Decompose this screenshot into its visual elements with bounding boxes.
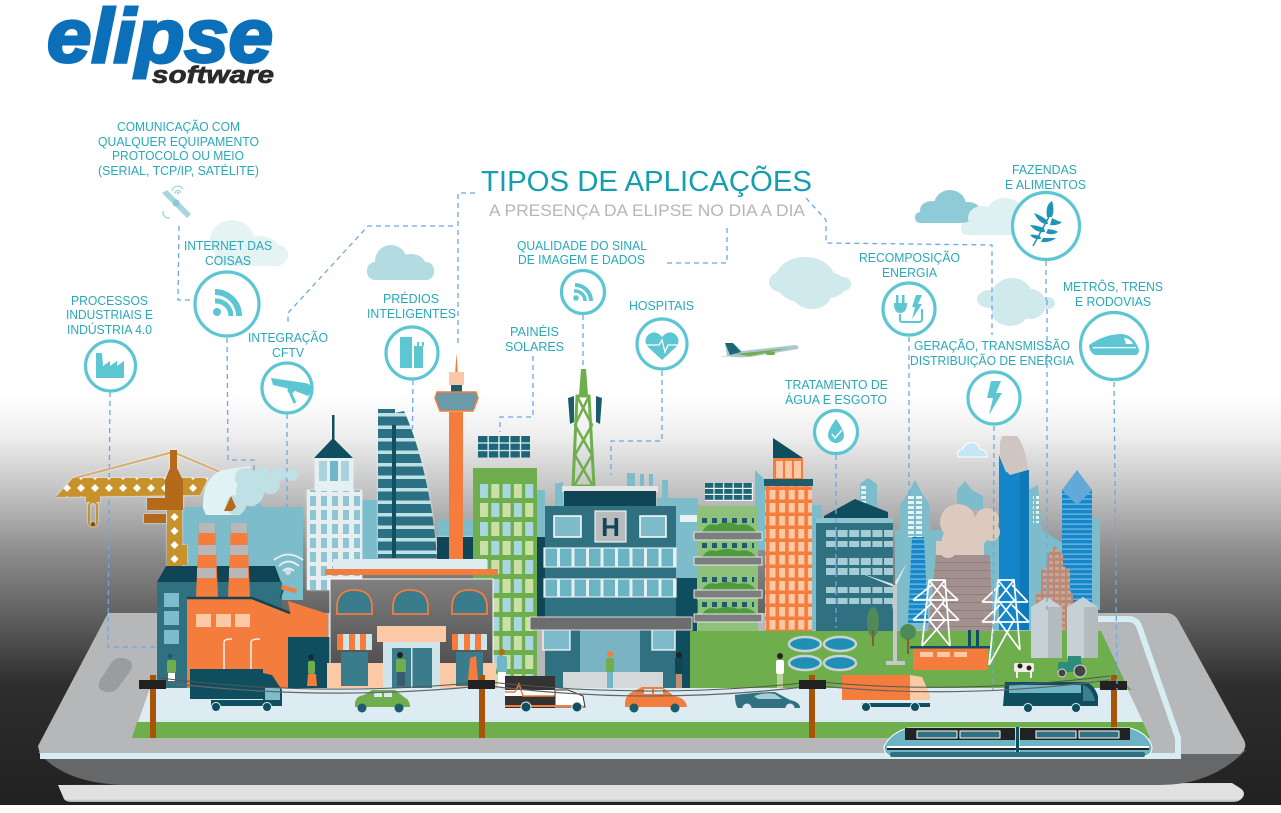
hospital: H <box>601 512 620 542</box>
factory <box>157 523 330 690</box>
callout: internet das coisas <box>184 239 272 336</box>
callout: hospitais: HOSPITAIS <box>629 299 694 313</box>
wind turbine and trees <box>860 563 916 665</box>
callout: processos industriais: INDÚSTRIA 4.0 <box>67 322 152 337</box>
callout: metrôs trens rodovias: E RODOVIAS <box>1075 295 1151 309</box>
callout: qualidade do sinal <box>517 239 647 314</box>
label: comunicação <box>98 120 259 178</box>
label: comunicação: (SERIAL, TCP/IP, SATÉLITE) <box>98 163 259 178</box>
brown building <box>1036 546 1073 632</box>
callout: hospitais <box>629 299 694 369</box>
cloud: pale right <box>977 278 1055 326</box>
awnings <box>337 634 487 650</box>
teal office block <box>816 499 893 631</box>
callout: prédios inteligentes: INTELIGENTES <box>367 307 456 321</box>
callout: integração cftv: INTEGRAÇÃO <box>248 331 328 345</box>
cloud: small sky blue <box>958 443 987 457</box>
callout: internet das coisas: INTERNET DAS <box>184 239 272 253</box>
callout: recomposição energia: ENERGIA <box>882 266 938 280</box>
callout: metrôs trens rodovias <box>1063 279 1163 380</box>
smoke from factory chimneys <box>203 466 298 515</box>
label: painéis solares <box>505 324 564 354</box>
callout: processos industriais: INDUSTRIAIS E <box>66 308 153 322</box>
power pylons <box>913 580 1029 665</box>
callout: tratamento de água: TRATAMENTO DE <box>785 378 888 392</box>
callout: recomposição energia: RECOMPOSIÇÃO <box>859 251 960 265</box>
orange tower <box>764 438 813 631</box>
logo: elipse software: software <box>152 62 274 89</box>
cloud: teal top-right <box>915 190 980 223</box>
cloud: pale top-right <box>961 198 1036 235</box>
main title <box>481 164 812 220</box>
label: painéis solares: SOLARES <box>505 340 564 354</box>
terraces <box>694 532 762 622</box>
arched windows <box>337 590 487 614</box>
satellite icon <box>162 186 191 218</box>
callout: processos industriais: PROCESSOS <box>71 294 148 308</box>
label: comunicação: PROTOCOLO OU MEIO <box>112 149 244 163</box>
callout: internet das coisas: COISAS <box>205 254 251 268</box>
wifi and camera on factory <box>274 554 303 598</box>
callout: geração transmissão <box>910 339 1075 424</box>
small window strips on skyline <box>680 486 1039 537</box>
bus <box>1003 682 1098 712</box>
callout: geração transmissão: DISTRIBUIÇÃO DE ENERGIA <box>910 354 1075 368</box>
cloud: teal centre-left <box>367 245 434 280</box>
water treatment tanks <box>789 637 856 670</box>
label: painéis solares: PAINÉIS <box>510 324 559 339</box>
terrace plants <box>702 522 756 614</box>
callout: processos industriais <box>66 294 153 391</box>
small blue striped tower <box>908 537 928 623</box>
white office tower <box>307 415 362 590</box>
orange car <box>625 687 687 712</box>
telecom tower <box>568 369 602 486</box>
lawn and road <box>132 631 1150 738</box>
people <box>167 649 784 688</box>
airplane <box>718 343 799 357</box>
observation tower <box>435 353 478 562</box>
small windows <box>702 518 754 607</box>
high speed train <box>884 727 1152 757</box>
cloud: pale left <box>210 220 288 266</box>
orange truck <box>842 675 930 712</box>
dashed connectors over city <box>836 300 1117 690</box>
solar panels <box>478 436 530 458</box>
storefront <box>325 559 498 690</box>
callout: tratamento de água: ÁGUA E ESGOTO <box>785 392 887 407</box>
label: comunicação: QUALQUER EQUIPAMENTO <box>98 135 259 149</box>
dashed connector lines <box>108 193 1046 647</box>
clouds <box>210 190 1055 326</box>
subtitle: A PRESENÇA DA ELIPSE NO DIA A DIA <box>489 201 806 220</box>
callout: prédios inteligentes: PRÉDIOS <box>383 291 439 306</box>
callout: geração transmissão: GERAÇÃO, TRANSMISSÃO <box>914 339 1070 353</box>
callout: metrôs trens rodovias: METRÔS, TRENS <box>1063 279 1163 294</box>
ambulance <box>505 676 585 712</box>
callout: fazendas e alimentos: FAZENDAS <box>1012 163 1077 177</box>
power plant and smoke <box>928 504 1000 632</box>
delivery truck teal <box>190 669 282 712</box>
callout: qualidade do sinal: DE IMAGEM E DADOS <box>518 253 645 267</box>
callout: recomposição energia <box>859 251 960 335</box>
cloud: pale centre-right <box>769 257 851 309</box>
teal car <box>735 692 800 712</box>
green car <box>355 690 410 712</box>
tablet device <box>38 613 1246 802</box>
callout: integração cftv: CFTV <box>272 346 305 360</box>
skyline background <box>183 470 1100 630</box>
rooftop solar array <box>705 483 753 501</box>
cow and tractor <box>1014 656 1086 678</box>
callout: fazendas e alimentos: E ALIMENTOS <box>1005 178 1086 192</box>
tall blue tower <box>999 436 1029 630</box>
green office building <box>473 468 537 690</box>
orange utility building <box>910 630 991 670</box>
blue diamond tower <box>1062 470 1092 620</box>
silos <box>1031 597 1098 658</box>
crane <box>56 450 220 570</box>
main title: TIPOS DE APLICAÇÕES <box>481 164 812 198</box>
callout: fazendas e alimentos <box>1005 163 1086 260</box>
curved striped skyscraper <box>378 409 473 567</box>
callout: integração cftv <box>248 331 328 413</box>
callout: tratamento de água <box>785 378 888 454</box>
utility poles and wires <box>139 675 1127 738</box>
label: comunicação: COMUNICAÇÃO COM <box>117 120 240 134</box>
green terrace building <box>694 483 762 690</box>
callout: prédios inteligentes <box>367 291 456 379</box>
hospital <box>530 486 697 690</box>
callout: qualidade do sinal: QUALIDADE DO SINAL <box>517 239 647 253</box>
